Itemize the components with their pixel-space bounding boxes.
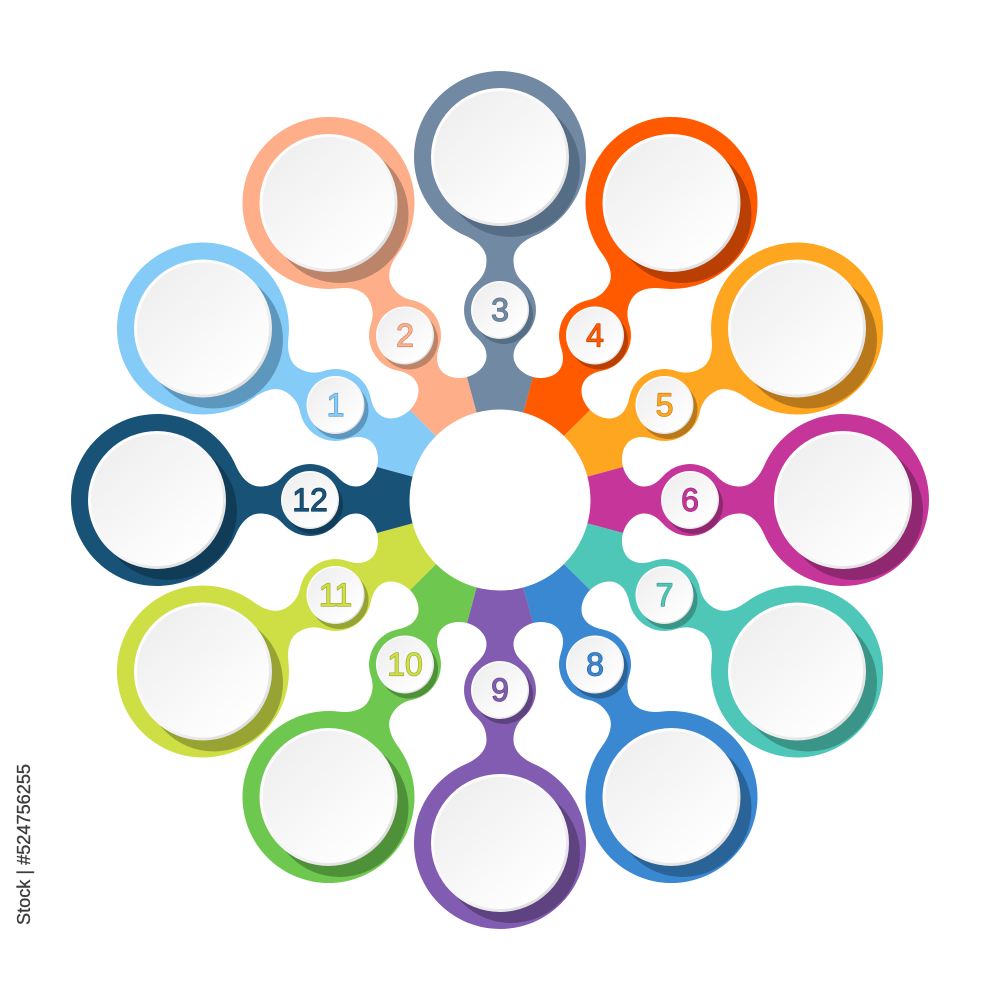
disc shadows 5 bbox=[640, 270, 877, 439]
number 1: 1 bbox=[327, 387, 344, 423]
number 12: 12 bbox=[292, 482, 328, 518]
connector arm 4 bbox=[466, 85, 789, 474]
number badge 11 bbox=[306, 566, 364, 624]
connector arm 5 bbox=[526, 211, 915, 534]
number badge 7 bbox=[636, 566, 694, 624]
disc shadows 3 bbox=[442, 99, 580, 344]
number 7: 7 bbox=[656, 577, 673, 613]
number 6: 6 bbox=[681, 482, 699, 518]
large blank circle 9 bbox=[431, 774, 569, 912]
connector arm 7 bbox=[526, 466, 915, 789]
connector arm 6 bbox=[580, 414, 929, 586]
segment 1: light blue bbox=[85, 211, 474, 534]
connector arm 3 bbox=[414, 71, 586, 420]
large blank circle 5 bbox=[728, 260, 866, 398]
segment 2: salmon bbox=[211, 85, 534, 474]
number badge 10 bbox=[376, 636, 434, 694]
number badge 9 bbox=[471, 661, 529, 719]
number badge 3 bbox=[471, 281, 529, 339]
stock id text: Stock | #524756255 bbox=[14, 764, 34, 925]
number badge 6 bbox=[661, 471, 719, 529]
number badge 2 bbox=[376, 306, 434, 364]
large blank circle 6 bbox=[774, 431, 912, 569]
number 5: 5 bbox=[656, 387, 673, 423]
segment 7: teal bbox=[526, 466, 915, 789]
number 8: 8 bbox=[586, 646, 604, 682]
connector arm 9 bbox=[414, 580, 586, 929]
disc shadows 10 bbox=[270, 640, 438, 877]
number 2: 2 bbox=[396, 318, 414, 354]
number badge 5 bbox=[636, 376, 694, 434]
segment 3: slate bbox=[414, 71, 586, 420]
number 9: 9 bbox=[491, 672, 509, 708]
disc shadows 7 bbox=[640, 571, 877, 752]
large blank circle 1 bbox=[134, 260, 272, 398]
connector arm 2 bbox=[211, 85, 534, 474]
segment 4: orange bbox=[466, 85, 789, 474]
large blank circle 2 bbox=[260, 134, 398, 272]
segment 9: purple bbox=[414, 580, 586, 929]
central hub bbox=[410, 410, 590, 590]
segment 10: green bbox=[211, 526, 534, 915]
connector arm 1 bbox=[85, 211, 474, 534]
number badge 12 bbox=[281, 471, 339, 529]
connector arm 12 bbox=[71, 414, 420, 586]
disc shadows 8 bbox=[570, 640, 752, 877]
number 3: 3 bbox=[491, 292, 509, 328]
large blank circle 10 bbox=[260, 728, 398, 866]
disc shadows 11 bbox=[145, 571, 368, 752]
large blank circle 7 bbox=[728, 602, 866, 740]
large blank circle 11 bbox=[134, 602, 272, 740]
disc shadows 12 bbox=[99, 442, 343, 580]
disc shadows 6 bbox=[665, 442, 923, 580]
segment 11: lime bbox=[85, 466, 474, 789]
number badge 1 bbox=[306, 376, 364, 434]
large blank circle 8 bbox=[602, 728, 740, 866]
number badge 8 bbox=[566, 636, 624, 694]
number 11: 11 bbox=[319, 577, 352, 613]
segment 6: magenta bbox=[580, 414, 929, 586]
number 4: 4 bbox=[586, 318, 604, 354]
number 10: 10 bbox=[387, 646, 423, 682]
connector arm 8 bbox=[466, 526, 789, 915]
large blank circle 3 bbox=[431, 88, 569, 226]
connector arm 11 bbox=[85, 466, 474, 789]
disc shadows 2 bbox=[270, 145, 438, 370]
segment 8: blue bbox=[466, 526, 789, 915]
disc shadows 1 bbox=[145, 270, 368, 439]
disc shadows 4 bbox=[570, 145, 752, 370]
number badge 4 bbox=[566, 306, 624, 364]
segment 5: amber bbox=[526, 211, 915, 534]
disc shadows 9 bbox=[442, 666, 580, 923]
connector arm 10 bbox=[211, 526, 534, 915]
large blank circle 12 bbox=[88, 431, 226, 569]
segment 12: navy bbox=[71, 414, 420, 586]
large blank circle 4 bbox=[602, 134, 740, 272]
